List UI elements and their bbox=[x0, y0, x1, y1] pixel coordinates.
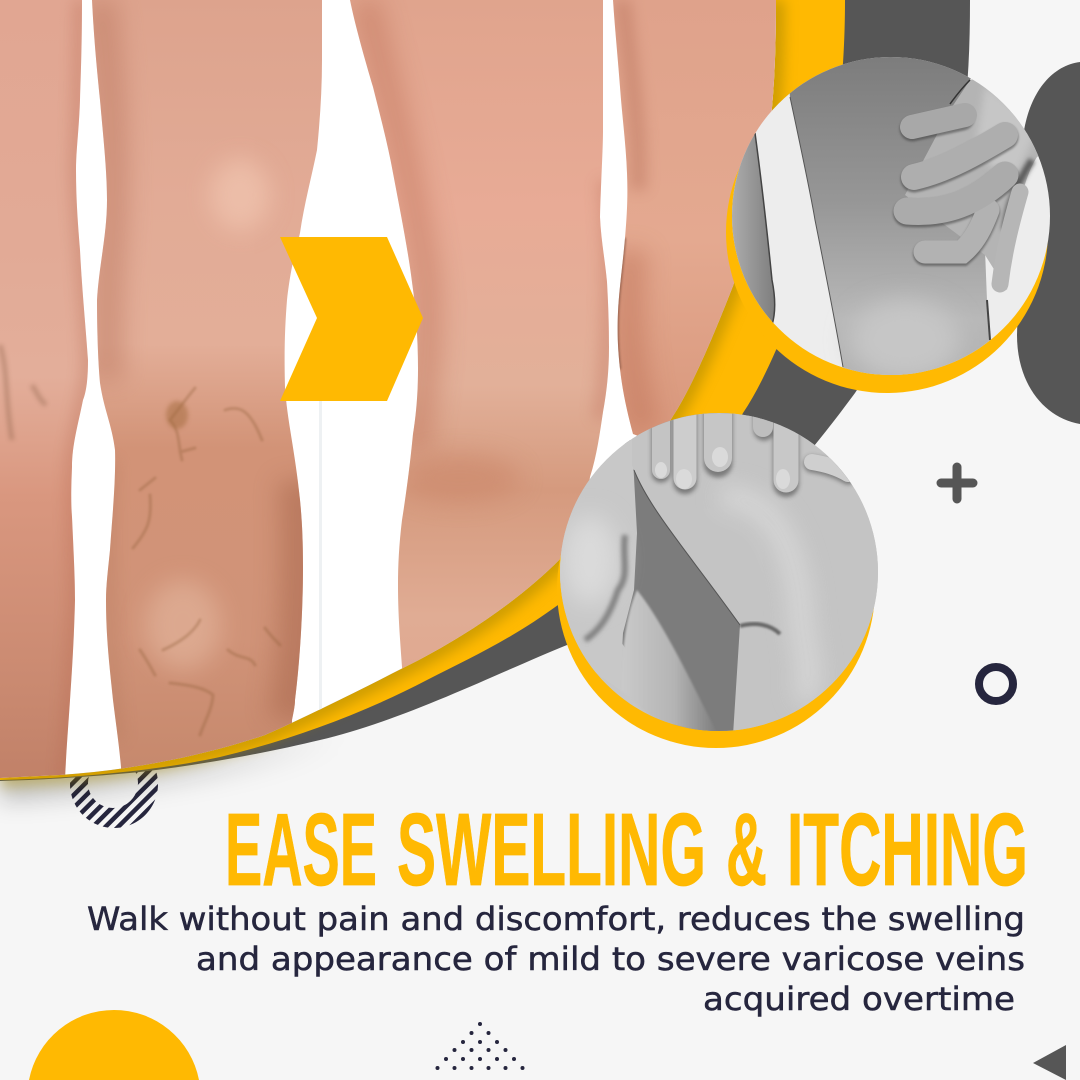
leg 3 (after) bbox=[350, 0, 609, 668]
fingers bbox=[661, 400, 848, 480]
yellow crescent behind lower circle bbox=[557, 430, 875, 748]
leg 2 (before, with veins) bbox=[92, 0, 322, 768]
yellow curved band bbox=[0, 0, 845, 780]
dotted triangle bbox=[436, 1022, 524, 1070]
leg 4 (after) bbox=[613, 0, 776, 436]
left leg bbox=[560, 440, 637, 673]
yellow band inner shading bbox=[0, 0, 776, 778]
grey triangle at bottom right bbox=[1033, 1045, 1066, 1080]
photo: before and after legs bbox=[0, 0, 800, 800]
photo circle: hands on swollen legs bbox=[560, 413, 878, 731]
hand bbox=[892, 80, 1038, 292]
yellow half circle at bottom left bbox=[29, 1010, 199, 1080]
left leg sliver bbox=[732, 133, 774, 322]
title bbox=[225, 792, 1028, 907]
body text bbox=[87, 900, 1025, 1018]
leg 1 (before) bbox=[0, 0, 88, 778]
plus icon bbox=[941, 467, 973, 499]
yellow arrow between before and after bbox=[280, 237, 423, 401]
grey curved band bbox=[0, 0, 970, 781]
dark gap between legs bbox=[622, 440, 740, 731]
ring icon bbox=[979, 667, 1013, 701]
body text: acquired overtime bbox=[703, 980, 1015, 1018]
title: EASE bbox=[225, 792, 377, 907]
body text: and appearance of mild to severe varicose veins bbox=[196, 940, 1025, 978]
shadow under curved photo edge bbox=[0, 726, 340, 800]
finger nails bbox=[655, 447, 790, 489]
body text: Walk without pain and discomfort, reduces the swelling bbox=[87, 900, 1025, 938]
finger shadows bbox=[907, 118, 1005, 254]
photo circle: hand scratching leg bbox=[725, 50, 1060, 385]
main leg bbox=[786, 55, 992, 385]
right thigh bbox=[632, 405, 885, 735]
title: SWELLING bbox=[397, 792, 706, 907]
finger shadows bbox=[661, 405, 848, 484]
varicose vein marks bbox=[133, 388, 280, 735]
yellow crescent behind top circle bbox=[726, 71, 1048, 393]
decorative striped ring bbox=[70, 740, 158, 828]
lower middle leg bbox=[621, 590, 718, 735]
fingers bbox=[907, 115, 1020, 284]
right grey rounded blob bbox=[1017, 62, 1080, 424]
title: & bbox=[726, 792, 767, 907]
